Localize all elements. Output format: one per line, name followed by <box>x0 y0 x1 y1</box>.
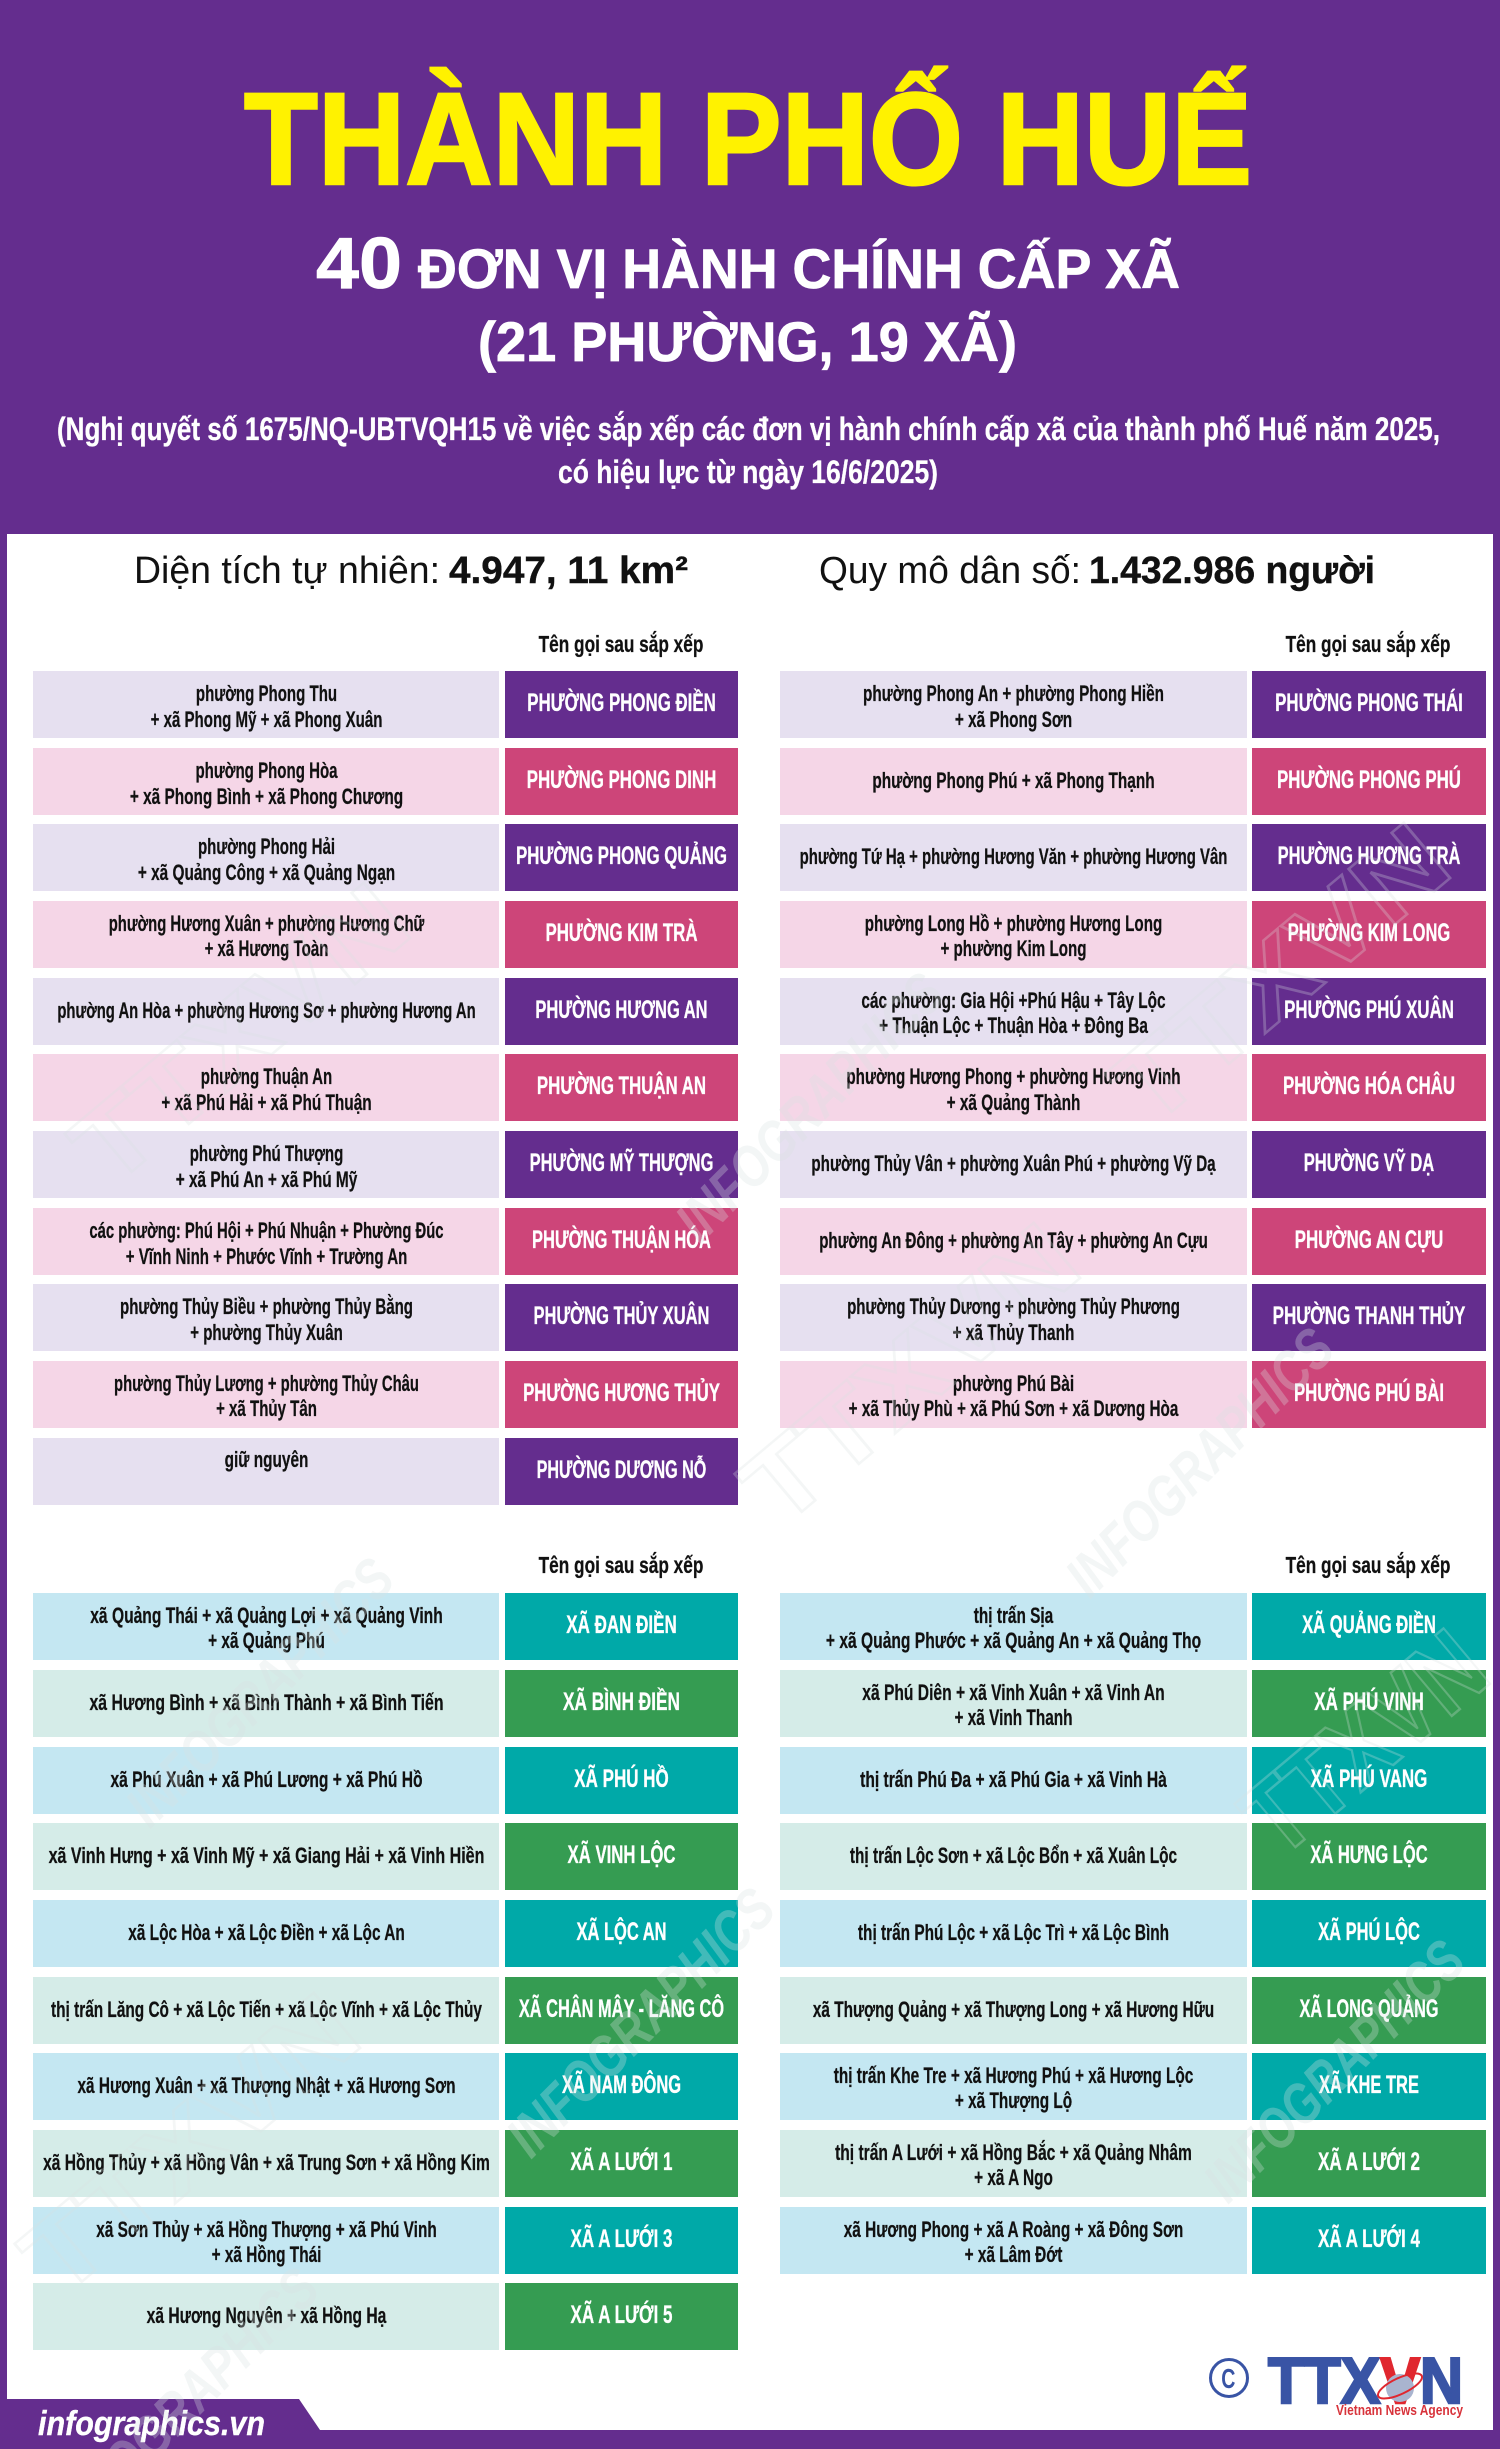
row: Phú Lộc: thị trấn Phú Lộc + xã Lộc Trì + xã Lộc Bình <box>858 1921 1169 1946</box>
row: Thuận Hóa: PHƯỜNG THUẬN HÓA <box>532 1224 711 1254</box>
row: Thủy Xuân <box>33 1284 738 1351</box>
row: Phú Vang <box>780 1747 1486 1814</box>
row: A Lưới 2: XÃ A LƯỚI 2 <box>1318 2147 1420 2176</box>
row: Phú Bài: phường Phú Bài <box>953 1372 1074 1397</box>
row: Phong Thái: phường Phong An + phường Phong Hiền <box>863 682 1164 707</box>
heading: column left, wards: Tên gọi sau sắp xếp <box>539 631 703 658</box>
panel: wards left column <box>33 671 738 1505</box>
row: Khe Tre: XÃ KHE TRE <box>1319 2069 1419 2099</box>
row: Phú Bài: PHƯỜNG PHÚ BÀI <box>1294 1378 1444 1407</box>
row: Phú Vinh: XÃ PHÚ VINH <box>1314 1687 1424 1716</box>
row: Bình Điền: XÃ BÌNH ĐIỀN <box>563 1687 680 1716</box>
row: Phú Hồ <box>33 1747 738 1814</box>
row: A Lưới 2: thị trấn A Lưới + xã Hồng Bắc + xã Quảng Nhâm <box>835 2140 1192 2166</box>
row: Phong Thái <box>780 671 1486 738</box>
row: A Lưới 2: + xã A Ngo <box>974 2166 1053 2191</box>
row: Phong Quảng: + xã Quảng Công + xã Quảng Ngạn <box>138 861 395 886</box>
icon: copyright <box>1210 2360 1248 2396</box>
row: Kim Trà: + xã Hương Toàn <box>205 936 328 961</box>
row: Thanh Thủy <box>780 1284 1486 1351</box>
row: A Lưới 4: XÃ A LƯỚI 4 <box>1318 2224 1420 2253</box>
logo: TTXVN: Vietnam News Agency <box>1336 2402 1464 2419</box>
row: Thuận An: PHƯỜNG THUẬN AN <box>537 1071 706 1100</box>
row: Thuận An: + xã Phú Hải + xã Phú Thuận <box>161 1091 372 1116</box>
row: Hóa Châu <box>780 1054 1486 1121</box>
row: A Lưới 5: XÃ A LƯỚI 5 <box>571 2300 673 2329</box>
row: Bình Điền: xã Hương Bình + xã Bình Thành + xã Bình Tiến <box>89 1692 444 1716</box>
row: Vinh Lộc: XÃ VINH LỘC <box>568 1840 675 1869</box>
row: Phong Phú: phường Phong Phú + xã Phong Thạnh <box>872 769 1155 794</box>
row: Quảng Điền: XÃ QUẢNG ĐIỀN <box>1302 1609 1436 1639</box>
row: Phong Quảng: phường Phong Hải <box>198 834 335 859</box>
row: Đan Điền <box>33 1593 738 1660</box>
row: Khe Tre: thị trấn Khe Tre + xã Hương Phú + xã Hương Lộc <box>834 2064 1193 2089</box>
watermark overlay: INFOGRAPHICS <box>494 1876 788 2169</box>
watermark overlay: INFOGRAPHICS <box>113 1546 407 1839</box>
row: Phú Xuân <box>780 978 1486 1045</box>
row: Hương An <box>33 978 738 1045</box>
row: Mỹ Thượng: phường Phú Thượng <box>190 1141 343 1166</box>
row: Phú Lộc: XÃ PHÚ LỘC <box>1318 1916 1420 1946</box>
panel: communes right column <box>780 1593 1486 2274</box>
legal note: có hiệu lực từ ngày 16/6/2025) <box>558 454 938 490</box>
row: A Lưới 5 <box>33 2283 738 2350</box>
row: Phú Vinh <box>780 1670 1486 1737</box>
panel: communes left column <box>33 1593 738 2350</box>
watermark overlay: INFOGRAPHICS <box>663 961 957 1254</box>
row: Phong Thái: + xã Phong Sơn <box>955 708 1072 733</box>
row: Lộc An <box>33 1900 738 1967</box>
watermark overlay: INFOGRAPHICS <box>1053 1316 1347 1609</box>
row: Phong Dinh: PHƯỜNG PHONG DINH <box>527 765 716 794</box>
row: Hóa Châu: + xã Quảng Thành <box>947 1091 1080 1116</box>
row: Nam Đông <box>33 2053 738 2120</box>
row: A Lưới 3: xã Sơn Thủy + xã Hồng Thượng + xã Phú Vinh <box>96 2218 437 2243</box>
row: Phú Xuân: các phường: Gia Hội +Phú Hậu + Tây Lộc <box>861 989 1166 1014</box>
row: An Cựu <box>780 1208 1486 1275</box>
row: Phong Điền: PHƯỜNG PHONG ĐIỀN <box>527 688 716 717</box>
row: Phú Hồ: xã Phú Xuân + xã Phú Lương + xã Phú Hồ <box>110 1769 423 1793</box>
row: Hương Thủy: phường Thủy Lương + phường Thủy Châu <box>114 1371 419 1396</box>
row: Hương An: PHƯỜNG HƯƠNG AN <box>535 994 708 1024</box>
row: Khe Tre: + xã Thượng Lộ <box>955 2089 1072 2114</box>
row: Quảng Điền: + xã Quảng Phước + xã Quảng An + xã Quảng Thọ <box>826 1630 1201 1654</box>
row: Đan Điền: xã Quảng Thái + xã Quảng Lợi + xã Quảng Vinh <box>90 1605 443 1629</box>
row: Mỹ Thượng: PHƯỜNG MỸ THƯỢNG <box>530 1147 713 1177</box>
row: Phú Hồ: XÃ PHÚ HỒ <box>574 1764 669 1793</box>
row: Đan Điền: + xã Quảng Phú <box>208 1629 325 1654</box>
row: Phong Phú <box>780 748 1486 815</box>
row: Long Quảng: XÃ LONG QUẢNG <box>1300 1996 1438 2023</box>
row: Hương Thủy: + xã Thủy Tân <box>216 1396 317 1421</box>
row: Thuận An: phường Thuận An <box>201 1064 332 1089</box>
row: Hưng Lộc: thị trấn Lộc Sơn + xã Lộc Bổn + xã Xuân Lộc <box>850 1844 1177 1869</box>
row: Lộc An: xã Lộc Hòa + xã Lộc Điền + xã Lộc An <box>128 1921 405 1946</box>
row: Mỹ Thượng <box>33 1131 738 1198</box>
subtitle: number of units: (21 PHƯỜNG, 19 XÃ) <box>478 310 1017 373</box>
row: Thuận Hóa: các phường: Phú Hội + Phú Nhuận + Phường Đúc <box>89 1218 444 1243</box>
row: Thuận An <box>33 1054 738 1121</box>
row: Phú Xuân: + Thuận Lộc + Thuận Hòa + Đông Ba <box>879 1014 1148 1039</box>
row: A Lưới 4: + xã Lâm Đớt <box>965 2243 1063 2268</box>
row: Phú Vang: thị trấn Phú Đa + xã Phú Gia + xã Vinh Hà <box>860 1769 1167 1793</box>
stat: natural area <box>134 550 688 592</box>
row: Chân Mây - Lăng Cô: thị trấn Lăng Cô + xã Lộc Tiến + xã Lộc Vĩnh + xã Lộc Thủy <box>51 1998 482 2023</box>
row: Kim Trà <box>33 901 738 968</box>
row: Chân Mây - Lăng Cô <box>33 1977 738 2044</box>
row: An Cựu: phường An Đông + phường An Tây + phường An Cựu <box>819 1228 1208 1253</box>
icon: copyright: C <box>1221 2364 1235 2395</box>
row: Phong Phú: PHƯỜNG PHONG PHÚ <box>1277 765 1461 794</box>
row: Hương Thủy <box>33 1361 738 1428</box>
heading: column left, communes: Tên gọi sau sắp xếp <box>539 1552 703 1579</box>
title: THÀNH PHỐ HUẾ <box>244 65 1252 212</box>
row: Phong Dinh: + xã Phong Bình + xã Phong Chương <box>130 785 403 810</box>
footer: site name: infographics.vn <box>38 2405 265 2443</box>
row: Mỹ Thượng: + xã Phú An + xã Phú Mỹ <box>176 1168 358 1193</box>
row: Phong Điền: phường Phong Thu <box>196 681 337 706</box>
row: Thanh Thủy: phường Thủy Dương + phường Thủy Phương <box>847 1294 1180 1319</box>
row: Phong Dinh: phường Phong Hòa <box>195 758 338 783</box>
row: Kim Long <box>780 901 1486 968</box>
row: Vỹ Dạ: PHƯỜNG VỸ DẠ <box>1304 1147 1434 1177</box>
logo: TTXVN: TTXVN <box>1268 2344 1463 2417</box>
row: Phong Thái: PHƯỜNG PHONG THÁI <box>1275 688 1463 717</box>
row: Hóa Châu: phường Hương Phong + phường Hương Vinh <box>846 1065 1181 1090</box>
row: Kim Trà: PHƯỜNG KIM TRÀ <box>545 918 698 947</box>
row: Long Quảng: xã Thượng Quảng + xã Thượng Long + xã Hương Hữu <box>813 1998 1214 2023</box>
row: Phong Quảng <box>33 824 738 891</box>
row: Nam Đông: XÃ NAM ĐÔNG <box>562 2069 681 2099</box>
row: Thuận Hóa: + Vĩnh Ninh + Phước Vĩnh + Trường An <box>126 1244 407 1269</box>
watermark overlay: TTXVN <box>50 861 431 1208</box>
row: Kim Long: + phường Kim Long <box>940 937 1087 962</box>
row: Vỹ Dạ <box>780 1131 1486 1198</box>
row: Vinh Lộc: xã Vinh Hưng + xã Vinh Mỹ + xã Giang Hải + xã Vinh Hiền <box>49 1845 484 1869</box>
row: Dương Nỗ: giữ nguyên <box>225 1448 308 1473</box>
row: Chân Mây - Lăng Cô: XÃ CHÂN MÂY - LĂNG CÔ <box>519 1995 724 2023</box>
panel: wards right column <box>780 671 1486 1428</box>
row: Hưng Lộc <box>780 1823 1486 1890</box>
row: A Lưới 2 <box>780 2130 1486 2197</box>
row: Nam Đông: xã Hương Xuân + xã Thượng Nhật + xã Hương Sơn <box>77 2074 456 2099</box>
row: Dương Nỗ <box>33 1438 738 1505</box>
subtitle: number of units: 40 <box>316 224 402 304</box>
row: Thủy Xuân: PHƯỜNG THỦY XUÂN <box>534 1300 709 1330</box>
stat: population <box>819 550 1375 592</box>
stat: natural area: Diện tích tự nhiên: <box>134 550 440 592</box>
row: Phong Dinh <box>33 748 738 815</box>
row: Đan Điền: XÃ ĐAN ĐIỀN <box>566 1610 677 1639</box>
row: Phú Vang: XÃ PHÚ VANG <box>1311 1764 1427 1793</box>
row: Thuận Hóa <box>33 1208 738 1275</box>
row: A Lưới 4: xã Hương Phong + xã A Roàng + xã Đông Sơn <box>844 2218 1183 2243</box>
row: Hóa Châu: PHƯỜNG HÓA CHÂU <box>1283 1071 1455 1100</box>
row: Phong Điền <box>33 671 738 738</box>
row: A Lưới 3: XÃ A LƯỚI 3 <box>571 2224 673 2253</box>
watermark overlay: TTXVN <box>720 1201 1101 1548</box>
row: Thanh Thủy: PHƯỜNG THANH THỦY <box>1273 1301 1465 1330</box>
stat: natural area: 4.947, 11 km² <box>449 550 688 592</box>
row: Vinh Lộc <box>33 1823 738 1890</box>
row: A Lưới 5: xã Hương Nguyên + xã Hồng Hạ <box>147 2305 387 2329</box>
row: Phú Bài: + xã Thủy Phù + xã Phú Sơn + xã Dương Hòa <box>849 1397 1179 1422</box>
watermark overlay: TTXVN <box>1090 801 1471 1148</box>
row: Hương Trà: PHƯỜNG HƯƠNG TRÀ <box>1278 840 1460 870</box>
row: Hưng Lộc: XÃ HƯNG LỘC <box>1310 1839 1428 1869</box>
row: An Cựu: PHƯỜNG AN CỰU <box>1295 1225 1443 1254</box>
row: Phong Quảng: PHƯỜNG PHONG QUẢNG <box>516 841 727 870</box>
row: Dương Nỗ: PHƯỜNG DƯƠNG NỖ <box>537 1455 706 1484</box>
stat: population: Quy mô dân số: <box>819 550 1081 592</box>
row: Kim Long: PHƯỜNG KIM LONG <box>1288 917 1450 947</box>
row: Phú Bài <box>780 1361 1486 1428</box>
row: A Lưới 3 <box>33 2207 738 2274</box>
row: Thủy Xuân: + phường Thủy Xuân <box>190 1320 343 1345</box>
row: A Lưới 1: xã Hồng Thủy + xã Hồng Vân + xã Trung Sơn + xã Hồng Kim <box>43 2152 490 2176</box>
panel: white content area <box>7 534 1493 2430</box>
row: Hương Trà: phường Tứ Hạ + phường Hương Văn + phường Hương Vân <box>800 844 1227 869</box>
stat: population: 1.432.986 người <box>1089 550 1375 592</box>
row: Bình Điền <box>33 1670 738 1737</box>
footer: purple tab <box>0 2399 1500 2449</box>
row: Quảng Điền <box>780 1593 1486 1660</box>
row: Long Quảng <box>780 1977 1486 2044</box>
row: Phú Xuân: PHƯỜNG PHÚ XUÂN <box>1284 995 1454 1024</box>
row: Hương An: phường An Hòa + phường Hương Sơ + phường Hương An <box>57 998 476 1023</box>
row: Phú Lộc <box>780 1900 1486 1967</box>
row: Phú Vinh: + xã Vinh Thanh <box>954 1706 1073 1731</box>
row: Vỹ Dạ: phường Thủy Vân + phường Xuân Phú + phường Vỹ Dạ <box>811 1152 1216 1177</box>
row: Kim Trà: phường Hương Xuân + phường Hương Chữ <box>109 911 425 936</box>
row: Thanh Thủy: + xã Thủy Thanh <box>953 1321 1074 1346</box>
row: Hương Trà <box>780 824 1486 891</box>
row: Quảng Điền: thị trấn Sịa <box>974 1604 1054 1629</box>
subtitle: number of units <box>316 224 1180 373</box>
row: A Lưới 1 <box>33 2130 738 2197</box>
row: Kim Long: phường Long Hồ + phường Hương Long <box>865 912 1162 937</box>
heading: column right, communes: Tên gọi sau sắp xếp <box>1286 1552 1450 1579</box>
heading: column right, wards: Tên gọi sau sắp xếp <box>1286 631 1450 658</box>
row: Khe Tre <box>780 2053 1486 2120</box>
watermark overlay <box>0 801 1500 2449</box>
row: A Lưới 3: + xã Hồng Thái <box>212 2243 321 2268</box>
row: Phú Vinh: xã Phú Diên + xã Vinh Xuân + xã Vinh An <box>862 1682 1165 1706</box>
row: A Lưới 4 <box>780 2207 1486 2274</box>
row: A Lưới 1: XÃ A LƯỚI 1 <box>571 2147 673 2176</box>
legal note <box>57 411 1440 490</box>
row: Thủy Xuân: phường Thủy Biều + phường Thủy Bằng <box>120 1294 413 1319</box>
row: Lộc An: XÃ LỘC AN <box>576 1916 667 1946</box>
subtitle: number of units: ĐƠN VỊ HÀNH CHÍNH CẤP XÃ <box>418 237 1180 300</box>
row: Phong Điền: + xã Phong Mỹ + xã Phong Xuân <box>151 707 382 732</box>
watermark overlay: TTXVN <box>0 1971 381 2318</box>
row: Hương Thủy: PHƯỜNG HƯƠNG THỦY <box>523 1378 720 1407</box>
